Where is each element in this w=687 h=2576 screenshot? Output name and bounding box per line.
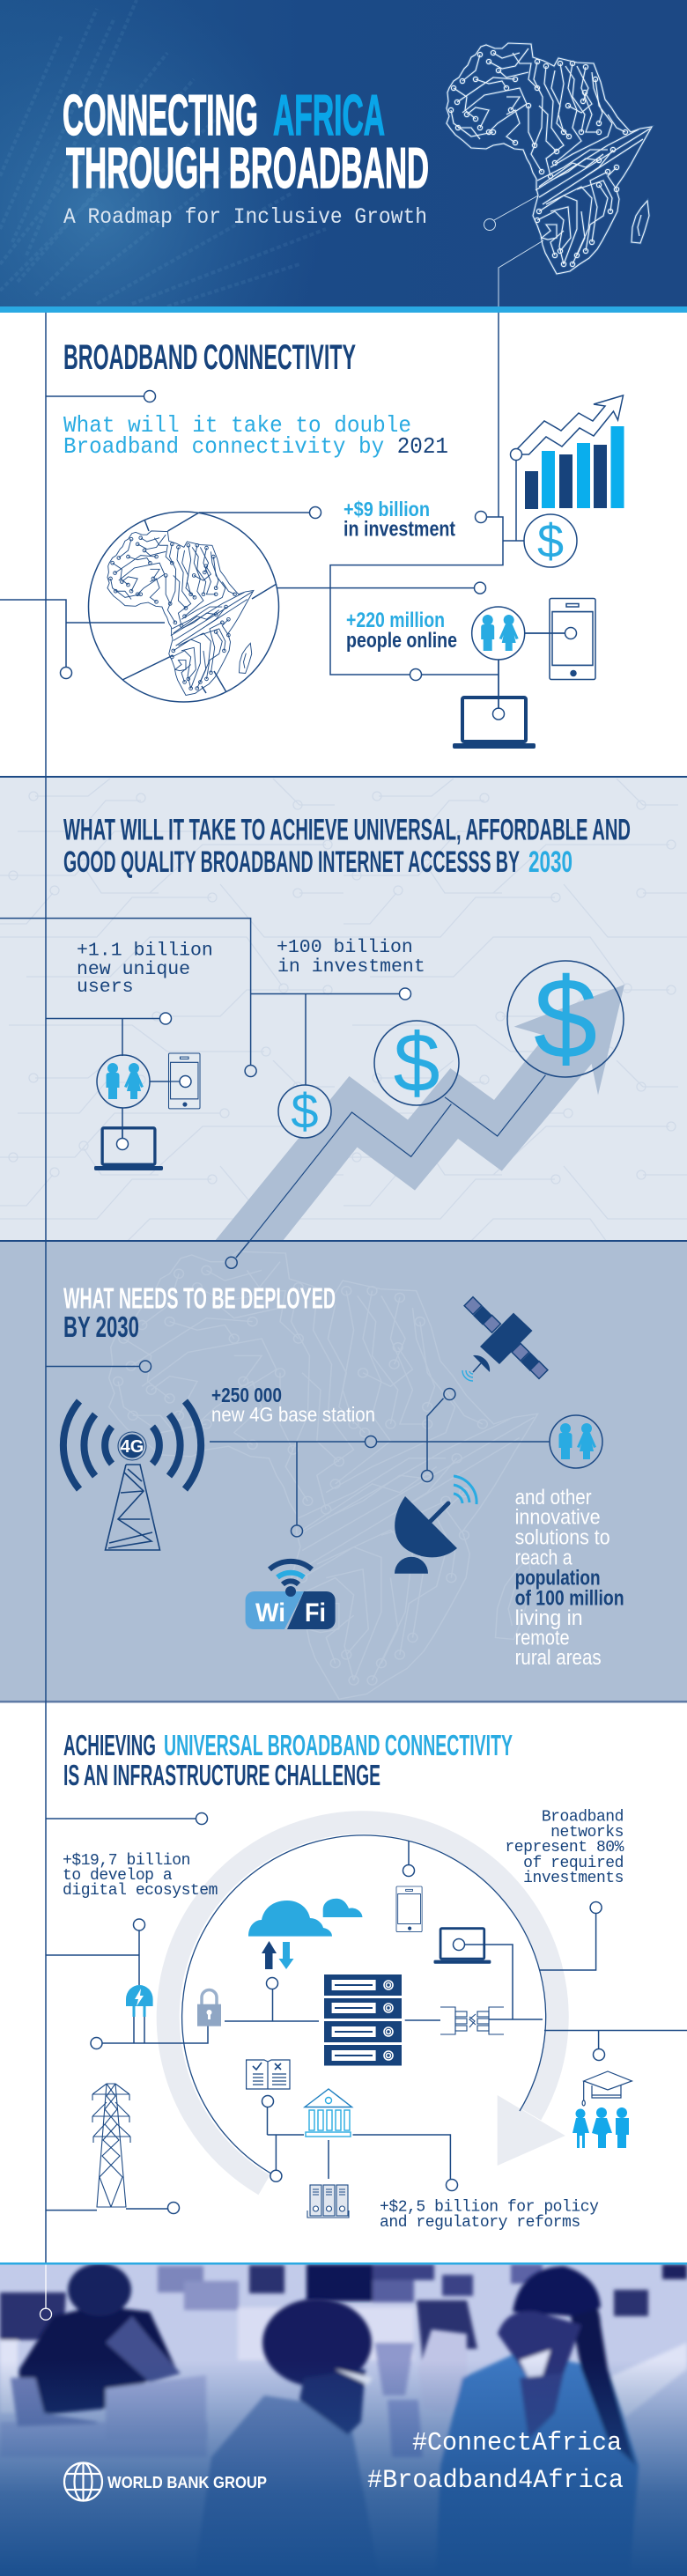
text: broadband networks share [505, 1809, 624, 1887]
icon: large dollar [507, 954, 624, 1082]
footer fade [0, 2360, 687, 2576]
text: policy reforms: and regulatory reforms [380, 2214, 580, 2232]
heading: BROADBAND CONNECTIVITY [63, 338, 356, 377]
icon: laptop [453, 660, 536, 749]
icon: small dollar: $ [291, 1083, 319, 1139]
header connectors [484, 196, 543, 306]
heading: 2030 [528, 845, 572, 879]
icon: wifi: Fi [305, 1598, 326, 1628]
title [63, 83, 429, 200]
rural solutions text: and other [515, 1486, 592, 1509]
text: broadband networks share: represent 80% [505, 1839, 624, 1856]
stat: investment: +100 billion [277, 937, 413, 958]
icon: laptop [94, 1127, 163, 1170]
icon: phone [396, 1886, 422, 1932]
text: broadband networks share: networks [550, 1824, 624, 1842]
icon: graduation cap [582, 2071, 632, 2106]
icon: phone [169, 1053, 200, 1109]
bar chart with arrow [511, 395, 624, 509]
stat: investment: in investment [277, 956, 425, 978]
icon: dollar circle [524, 514, 577, 568]
stat: new users: new unique [77, 959, 190, 980]
rural solutions text: solutions to [515, 1526, 610, 1550]
rural solutions text: population [515, 1566, 601, 1590]
icon: padlock [197, 1990, 221, 2026]
text: digital ecosystem: to develop a [63, 1867, 173, 1885]
heading [63, 1281, 336, 1343]
icon: satellite dish [395, 1476, 476, 1574]
rural solutions text: innovative [515, 1506, 601, 1530]
icon: transmission pylon [92, 2084, 130, 2207]
title: AFRICA [273, 83, 385, 147]
stat: base stations: new 4G base station [211, 1403, 375, 1426]
stat: investment: in investment [344, 518, 455, 541]
icon: laptop [433, 1929, 491, 1964]
icon: binders [307, 2185, 349, 2218]
hashtags: #Broadband4Africa [367, 2466, 624, 2496]
icon: bank building [305, 2089, 352, 2137]
text: broadband networks share: Broadband [542, 1809, 624, 1827]
icon: cloud [248, 1899, 363, 1937]
subtitle: A Roadmap for Inclusive Growth [63, 204, 427, 230]
growth arrow [215, 985, 624, 1241]
text: broadband networks share: of required [523, 1855, 624, 1872]
ring arrow [168, 1822, 565, 2185]
icon: large dollar: $ [534, 954, 597, 1082]
icon: phone [550, 599, 595, 680]
rural solutions text: rural areas [515, 1646, 602, 1670]
photo: people [11, 2263, 639, 2576]
panel: header banner [0, 0, 687, 313]
panel: universal access [0, 776, 687, 1241]
heading: ACHIEVING [63, 1729, 156, 1761]
icon: wifi: Wi [255, 1598, 285, 1628]
stat: investment: +$9 billion [344, 498, 430, 520]
heading: BY 2030 [63, 1310, 139, 1343]
icon: dollar circle: $ [537, 515, 564, 568]
world bank group logo: WORLD BANK GROUP [107, 2473, 267, 2491]
text: policy reforms: +$2,5 billion for policy [380, 2198, 599, 2216]
question text: What will it take to double [63, 412, 411, 439]
icon: small dollar [278, 1083, 331, 1139]
rural solutions text: reach a [515, 1546, 572, 1569]
rural solutions text: of 100 million [515, 1587, 624, 1610]
heading [63, 814, 631, 879]
stat: new users [77, 941, 213, 998]
heading: IS AN INFRASTRUCTURE CHALLENGE [63, 1759, 380, 1791]
stat: new users: +1.1 billion [77, 941, 213, 962]
africa circuit map [447, 43, 652, 274]
stat: new users: users [77, 977, 134, 998]
text: digital ecosystem [63, 1852, 218, 1900]
globe with africa map [88, 512, 278, 702]
text: digital ecosystem: digital ecosystem [63, 1882, 218, 1900]
icon: children [572, 2107, 629, 2148]
stat: people online: people online [346, 629, 457, 653]
heading [63, 1729, 513, 1791]
stat: base stations: +250 000 [211, 1384, 282, 1406]
icon: people [472, 607, 525, 660]
photo backdrop [0, 2264, 687, 2457]
stat: investment [344, 498, 455, 541]
icon: medium dollar [374, 1016, 459, 1110]
panel: infrastructure challenge [0, 1701, 687, 2263]
icon: medium dollar: $ [394, 1016, 440, 1110]
stat: people online: +220 million [346, 609, 445, 632]
icon: power plug [126, 1985, 153, 2017]
rural solutions text: remote [515, 1627, 570, 1650]
panel: footer photo [0, 2263, 687, 2576]
icon: connector [440, 2007, 504, 2034]
connectors [46, 1361, 550, 1537]
icon: checklist book [247, 2060, 290, 2089]
rural solutions text: living in [515, 1606, 583, 1630]
icon: satellite [462, 1297, 548, 1381]
rural solutions text [515, 1486, 624, 1670]
panel: deployment [0, 1240, 687, 1701]
connector [41, 2264, 51, 2320]
panel: broadband connectivity [0, 313, 687, 776]
connectors [0, 919, 545, 1241]
stat: base stations [211, 1384, 375, 1426]
stat: people online [346, 609, 457, 653]
stat: investment [277, 937, 425, 978]
icon: people [550, 1415, 602, 1468]
panel connectors [0, 313, 565, 708]
icon: up and down arrows [262, 1941, 294, 1969]
world bank group logo [64, 2462, 267, 2501]
text: policy reforms [380, 2198, 599, 2232]
question text: Broadband connectivity by 2021 [63, 433, 448, 460]
connectors [46, 1819, 687, 2211]
question text [63, 412, 448, 460]
hashtags [368, 2431, 624, 2487]
icon: people [97, 1055, 150, 1108]
icon: 4G tower [63, 1401, 201, 1550]
title: CONNECTING [63, 83, 258, 147]
heading: WHAT NEEDS TO BE DEPLOYED [63, 1281, 336, 1314]
text: broadband networks share: investments [523, 1870, 624, 1887]
text: digital ecosystem: +$19,7 billion [63, 1852, 190, 1870]
left vertical connector [45, 313, 47, 2264]
hashtags: #ConnectAfrica [412, 2429, 622, 2459]
icon: wifi [246, 1561, 336, 1629]
icon: 4G tower: 4G [121, 1437, 144, 1457]
icon: server stack [324, 1974, 402, 2066]
